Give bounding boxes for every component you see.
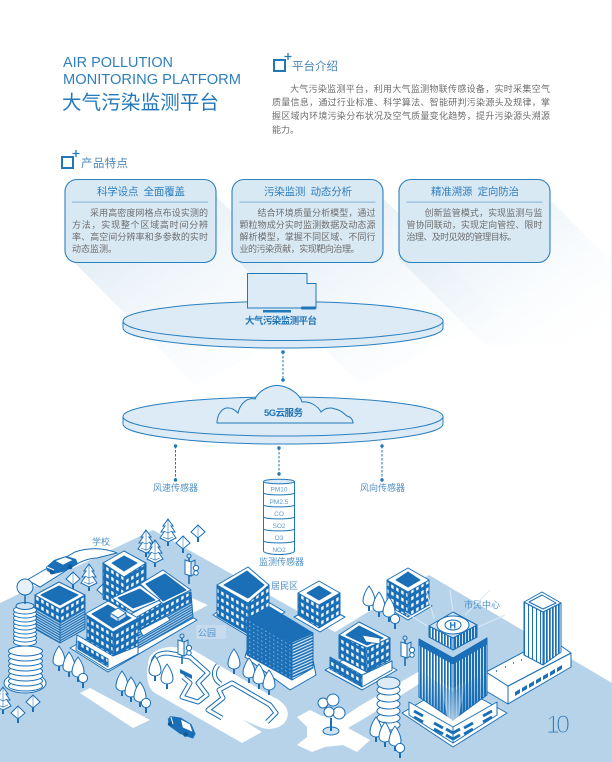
label: wind direction sensor: 风向传感器 <box>360 482 405 493</box>
helipad mark: H <box>450 620 456 630</box>
connector: wind speed <box>174 444 177 482</box>
building: right small <box>384 568 432 620</box>
icon: monitors <box>248 274 316 312</box>
title: AIR POLLUTION <box>63 54 173 71</box>
building: residential <box>213 567 285 636</box>
monitoring sensor stack: CO <box>274 511 284 518</box>
light rays <box>405 590 505 627</box>
icon: helipad <box>437 616 469 634</box>
label: park <box>196 625 226 639</box>
label: park: 公园 <box>198 628 216 638</box>
panel: precise tracing: 管协同联动，实现定向管控、限时 <box>406 219 542 230</box>
card diagonal shadows <box>70 190 612 385</box>
trees: front <box>370 717 405 758</box>
building: tall dark block <box>245 607 316 690</box>
panel: scientific siting: 科学设点 全面覆盖 <box>97 185 186 198</box>
panel: scientific siting <box>65 180 216 262</box>
building: long school block <box>70 570 197 672</box>
pines and diamond trees <box>0 519 205 723</box>
tower glow <box>440 680 466 720</box>
panel: dynamic analysis: 解析模型，掌握不同区域、不同行 <box>240 231 376 242</box>
panel: scientific siting: 采用高密度网格点布设实测的 <box>90 207 208 218</box>
panel: scientific siting: 动态监测。 <box>72 243 117 254</box>
park paths <box>153 653 276 722</box>
title: MONITORING PLATFORM <box>63 71 241 88</box>
building: low wide hall <box>486 638 571 704</box>
car: lower <box>165 709 199 745</box>
signal towers <box>178 554 415 666</box>
title: 大气污染监测平台 <box>62 92 219 114</box>
heading: platform intro <box>274 53 338 73</box>
connector: platform to cloud <box>281 350 285 382</box>
platform disc: 大气污染监测平台 <box>245 315 317 327</box>
tower: round left <box>4 579 46 693</box>
tower: office <box>524 592 561 665</box>
car: upper <box>46 556 78 574</box>
connector: wind direction <box>380 444 384 482</box>
label: civic center: 市民中心 <box>464 599 500 610</box>
ground <box>0 530 612 762</box>
panel: dynamic analysis: 结合环境质量分析模型，通过 <box>258 207 376 218</box>
label: monitoring sensor: 监测传感器 <box>259 556 304 567</box>
building: mid small <box>294 581 345 632</box>
panel: dynamic analysis: 业的污染贡献，实现靶向治理。 <box>240 243 360 254</box>
monitoring sensor stack: O3 <box>275 535 284 542</box>
round trees <box>53 586 400 713</box>
panel: dynamic analysis: 污染监测 动态分析 <box>264 185 352 198</box>
building: mixed use <box>325 622 397 690</box>
heading: product features <box>62 150 128 170</box>
helipad mark <box>445 620 461 630</box>
icon: cloud <box>217 385 353 423</box>
school road <box>27 549 117 587</box>
text block: platform intro <box>272 83 550 135</box>
panel: precise tracing: 治理、及时见效的管理目标。 <box>406 231 516 242</box>
tree: plaza <box>318 694 345 735</box>
platform disc <box>123 274 443 348</box>
monitoring sensor stack: PM10 <box>271 486 288 494</box>
title <box>62 54 241 114</box>
connector: monitoring <box>277 446 281 476</box>
panel: scientific siting: 率、高空间分辨率和多参数的实时 <box>72 231 208 242</box>
text block: platform intro: 能力。 <box>272 124 299 135</box>
monitoring sensor stack: PM2.5 <box>270 499 289 506</box>
text block: platform intro: 质量信息，通过行业标准、科学算法、智能研判污染源头及规律，掌 <box>272 96 550 108</box>
label: residential area: 居民区 <box>271 581 298 591</box>
panel: scientific siting: 方法，实现整个区域高时间分辨 <box>72 219 208 230</box>
heading: platform intro: 平台介绍 <box>292 59 338 73</box>
tower: civic center <box>402 612 507 747</box>
label: wind speed sensor: 风速传感器 <box>153 482 198 493</box>
panel: precise tracing: 创新监管模式，实现监测与监 <box>424 207 542 218</box>
panel: precise tracing: 精准溯源 定向防治 <box>431 185 519 198</box>
heading: product features: 产品特点 <box>81 156 128 170</box>
text block: platform intro: 大气污染监测平台，利用大气监测物联传感设备，实时采集空气 <box>290 83 550 94</box>
icon: park bench <box>180 669 192 679</box>
panel: dynamic analysis <box>232 180 383 262</box>
building: cylinder <box>377 677 400 730</box>
tower shading <box>419 670 487 720</box>
monitoring sensor stack <box>264 479 294 554</box>
building: school left <box>35 582 85 643</box>
roof dots <box>496 660 522 671</box>
cloud service disc: 5G云服务 <box>264 407 303 419</box>
building: rear school <box>103 551 146 612</box>
panel: precise tracing <box>399 180 550 262</box>
white ground plots and roads <box>80 598 425 752</box>
page number: 10 <box>546 711 570 739</box>
monitoring sensor stack: SO2 <box>272 523 286 530</box>
text block: platform intro: 握区域内环境污染分布状况及空气质量变化趋势，提升污染源头溯源 <box>272 110 550 121</box>
monitoring sensor stack: NO2 <box>272 547 286 554</box>
cloud service disc <box>123 385 443 444</box>
panel: dynamic analysis: 颗粒物成分实时监测数据及动态源 <box>240 219 376 230</box>
label: school: 学校 <box>92 536 110 547</box>
